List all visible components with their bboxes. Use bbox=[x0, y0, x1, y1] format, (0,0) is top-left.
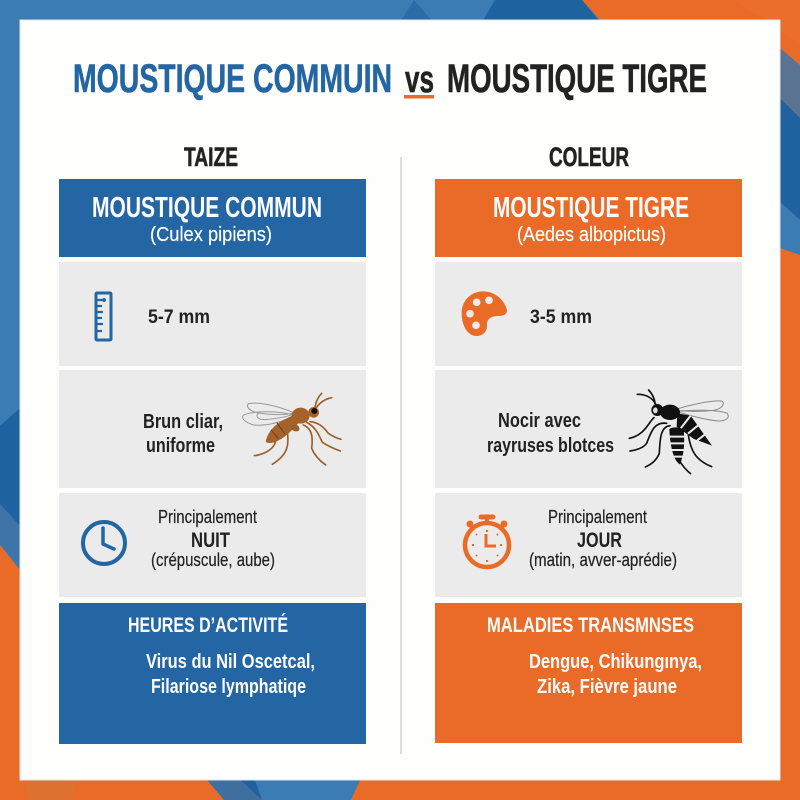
text: 3-5 mm: 3-5 mm bbox=[530, 307, 592, 328]
text: 5-7 mm: 5-7 mm bbox=[148, 307, 210, 328]
text: night: (crépuscule, aube) bbox=[151, 550, 275, 570]
title: vs bbox=[405, 59, 434, 101]
header: moustique tigre bbox=[435, 179, 742, 257]
icon: ruler bbox=[96, 293, 111, 340]
panel: diseases, common mosquito: Virus du Nil Oscetcal, bbox=[146, 651, 315, 673]
header: moustique tigre: (Aedes albopictus) bbox=[517, 224, 666, 246]
header: moustique commun bbox=[59, 179, 366, 257]
panel: moustique commun column bbox=[59, 179, 366, 744]
panel: diseases, common mosquito bbox=[59, 603, 366, 744]
icon: tiger mosquito bbox=[629, 390, 728, 474]
header: moustique commun: MOUSTIQUE COMMUN bbox=[92, 192, 322, 224]
panel: diseases, tiger mosquito: MALADIES TRANSMNSES bbox=[487, 614, 694, 637]
panel: diseases, common mosquito: HEURES D’ACTIVITÉ bbox=[128, 614, 288, 637]
panel: moustique tigre column bbox=[435, 179, 742, 743]
row: activity bbox=[59, 493, 366, 597]
icon: brown mosquito bbox=[243, 393, 341, 465]
text: day: Principalement bbox=[548, 507, 647, 527]
text: night: NUIT bbox=[191, 529, 230, 552]
text: day: (matin, avver-aprédie) bbox=[529, 550, 677, 570]
text: night: Principalement bbox=[158, 507, 257, 527]
text: day: JOUR bbox=[577, 529, 622, 552]
text: night bbox=[151, 507, 275, 570]
text: brun clair: uniforme bbox=[146, 435, 215, 457]
header: moustique commun: (Culex pipiens) bbox=[150, 224, 272, 246]
row: size bbox=[435, 262, 742, 366]
panel: diseases, common mosquito: Filariose lymphatiqe bbox=[151, 676, 306, 698]
row: colour bbox=[59, 370, 366, 488]
column heading: taille: TAIZE bbox=[184, 142, 238, 172]
panel: diseases, tiger mosquito: Dengue, Chikungınya, bbox=[529, 651, 702, 673]
row: size bbox=[59, 262, 366, 366]
text: noir avec rayures bbox=[487, 410, 614, 457]
text: brun clair bbox=[143, 411, 223, 457]
text: day bbox=[529, 507, 677, 570]
panel: diseases, tiger mosquito: Zika, Fièvre jaune bbox=[537, 676, 677, 698]
title: MOUSTIQUE COMMUIN bbox=[73, 57, 392, 101]
panel: diseases, tiger mosquito bbox=[435, 603, 742, 743]
header: moustique tigre: MOUSTIQUE TIGRE bbox=[493, 192, 689, 224]
text: noir avec rayures: Nocir avec bbox=[498, 410, 581, 432]
icon: clock bbox=[83, 522, 125, 564]
icon: stopwatch bbox=[465, 517, 509, 567]
icon: palette bbox=[462, 291, 507, 336]
text: noir avec rayures: rayruses blotces bbox=[487, 435, 614, 457]
column heading: couleur: COLEUR bbox=[549, 142, 629, 172]
row: activity bbox=[435, 493, 742, 597]
row: colour bbox=[435, 370, 742, 488]
text: brun clair: Brun cliar, bbox=[143, 411, 223, 433]
